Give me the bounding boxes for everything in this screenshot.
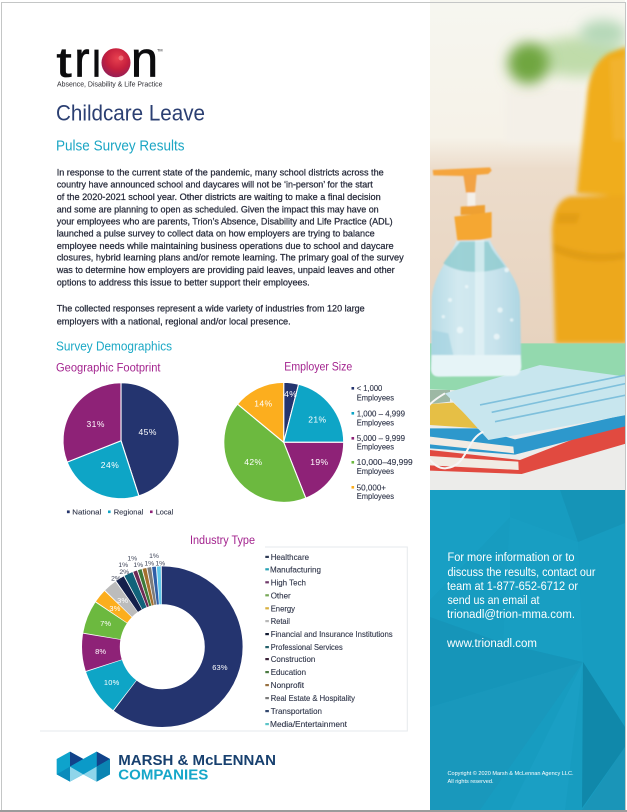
logo: Trion: r <box>74 32 90 88</box>
logo: Marsh & McLennan Companies: MARSH & McLENNAN <box>118 753 276 769</box>
text block: introduction: launched a pulse survey to collect data on how employers are trying to balance <box>57 228 375 239</box>
donut chart: industry type: 1% <box>133 562 143 569</box>
title: Childcare Leave <box>56 101 205 126</box>
red book <box>430 426 625 474</box>
contact text: send us an email at <box>448 593 540 607</box>
panel: contact information <box>430 490 625 810</box>
legend: geographic footprint: Local <box>156 508 174 516</box>
legend: industry type: High Tech <box>271 578 306 587</box>
legend: industry type: Nonprofit <box>271 681 305 690</box>
donut chart: industry type: 3% <box>109 604 121 613</box>
donut chart: industry type: 1% <box>144 560 154 568</box>
legend: industry type: Financial and Insurance Institutions <box>271 630 393 639</box>
legend: employer size <box>352 384 413 501</box>
pie chart: employer size: 21% <box>308 414 326 424</box>
logo: Marsh & McLennan Companies <box>57 752 276 783</box>
heading: industry type: Industry Type <box>190 535 255 547</box>
pie chart: employer size: 14% <box>254 398 272 408</box>
text block: introduction: The collected responses represent a wide variety of industries from 120 large <box>57 303 365 314</box>
copyright: All rights reserved. <box>448 779 494 785</box>
logo: Trion: Absence, Disability & Life Practice <box>57 82 163 88</box>
heading: survey demographics: Survey Demographics <box>56 339 172 353</box>
pie chart: geographic footprint <box>63 383 179 499</box>
legend: industry type: Professional Services <box>271 643 343 652</box>
logo: Trion: t <box>56 38 72 86</box>
donut chart: industry type: 8% <box>95 647 106 656</box>
legend: employer size: Employees <box>357 442 394 451</box>
pie chart: geographic footprint: 24% <box>101 460 119 470</box>
contact text: trionadl@trion-mma.com. <box>447 607 575 621</box>
legend: geographic footprint <box>67 508 174 516</box>
legend: employer size: < 1,000 <box>357 384 383 393</box>
pie chart: geographic footprint: 31% <box>86 419 105 429</box>
donut chart: industry type: 1% <box>127 556 137 562</box>
pie chart: employer size: 4% <box>284 389 297 399</box>
pie chart: geographic footprint: 45% <box>138 427 157 437</box>
donut chart: industry type: 2% <box>111 576 121 582</box>
legend: employer size: 50,000+ <box>357 483 386 492</box>
donut chart: industry type: 1% <box>149 553 159 560</box>
mask <box>445 365 627 440</box>
legend: industry type: Manufacturing <box>270 565 321 574</box>
heading: geographic footprint: Geographic Footprint <box>56 363 161 375</box>
legend: industry type <box>265 553 393 729</box>
donut chart: industry type: 7% <box>100 619 111 628</box>
pie chart: employer size: 19% <box>310 457 328 467</box>
blue book <box>430 414 627 455</box>
logo: Trion: n <box>131 32 158 88</box>
legend: employer size: Employees <box>357 492 394 501</box>
logo: Trion: ı <box>91 32 102 88</box>
logo: Trion <box>56 32 163 88</box>
legend: industry type: Energy <box>271 604 295 613</box>
text block: introduction: was to determine how employers are providing paid leaves, unpaid leaves and other <box>56 264 395 275</box>
contact text: discuss the results, contact our <box>448 565 596 579</box>
legend: employer size: 10,000–49,999 <box>357 458 413 467</box>
contact text: www.trionadl.com <box>446 636 537 650</box>
legend: industry type: Other <box>271 591 291 600</box>
text block: introduction: employee needs while maintaining business operations due to school and daycare <box>57 240 394 251</box>
text block: introduction: country have announced school and daycares will not be ‘in-person’ for the start <box>57 178 373 190</box>
contact text <box>446 550 596 650</box>
donut chart: industry type: 1% <box>155 560 165 568</box>
contact text: For more information or to <box>448 550 575 564</box>
text block: introduction: In response to the current state of the pandemic, many school districts across the <box>57 166 384 178</box>
text block: introduction: your employees who are parents, Trion’s Absence, Disability and Life Practice (ADL) <box>57 216 393 227</box>
legend: employer size: Employees <box>357 418 394 427</box>
donut chart: industry type: 1% <box>118 562 128 569</box>
legend: industry type: Education <box>271 668 306 677</box>
donut chart: industry type: 2% <box>119 569 129 576</box>
pie chart: employer size: 42% <box>244 457 262 467</box>
legend: employer size: Employees <box>357 393 394 402</box>
photo: sanitizer bottle, mask and books <box>428 0 627 490</box>
legend: industry type: Media/Entertainment <box>270 720 348 729</box>
text block: introduction: options to address this issue to better support their employees. <box>57 277 310 288</box>
copyright <box>448 770 574 785</box>
logo: Trion: TM <box>157 48 162 52</box>
text block: introduction: of the 2020-2021 school year. Other districts are waiting to make a final decision <box>57 191 381 202</box>
subtitle: Pulse Survey Results <box>56 138 184 155</box>
legend: industry type: Retail <box>271 617 290 626</box>
text block: introduction: employers with a national, regional and/or local presence. <box>57 316 291 327</box>
legend: employer size: 1,000 – 4,999 <box>357 409 406 418</box>
legend: employer size: Employees <box>357 467 394 476</box>
donut chart: industry type: 3% <box>117 596 128 605</box>
donut chart: industry type <box>95 553 228 708</box>
yellow book <box>430 403 480 428</box>
legend: industry type: Construction <box>271 655 315 664</box>
heading: employer size: Employer Size <box>284 362 352 374</box>
legend: industry type: Transportation <box>271 707 322 716</box>
copyright: Copyright © 2020 Marsh & McLennan Agency LLC. <box>448 770 574 777</box>
donut chart: industry type: 10% <box>104 678 120 687</box>
legend: employer size: 5,000 – 9,999 <box>357 434 406 443</box>
text block: introduction: and some are planning to open as scheduled. Given the impact this may have on <box>57 203 379 214</box>
text block: introduction <box>56 166 404 327</box>
pie chart: employer size <box>224 382 344 502</box>
backpack <box>552 47 627 343</box>
contact text: team at 1-877-652-6712 or <box>447 579 578 593</box>
donut chart: industry type: 63% <box>212 663 228 672</box>
legend: geographic footprint: Regional <box>114 508 144 516</box>
logo: Marsh & McLennan Companies: COMPANIES <box>118 767 209 783</box>
legend: industry type: Healthcare <box>271 553 310 562</box>
legend: geographic footprint: National <box>72 508 102 516</box>
text block: introduction: closures, hybrid learning plans and/or remote learning. The primary goal of the survey <box>57 252 404 262</box>
mint book <box>430 343 627 392</box>
bottle <box>431 167 521 377</box>
legend: industry type: Real Estate & Hospitality <box>271 694 355 703</box>
